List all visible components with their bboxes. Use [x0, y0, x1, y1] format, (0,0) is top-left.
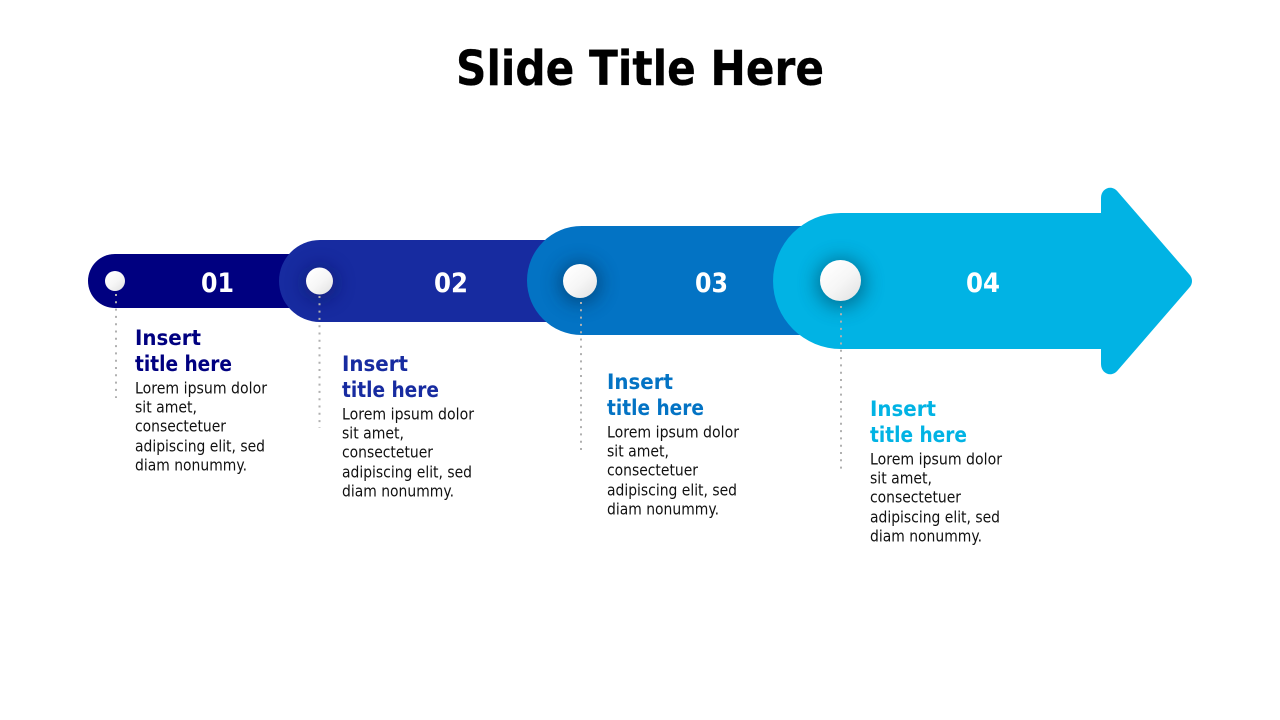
marker 02	[306, 268, 333, 294]
body text 02: adipiscing elit, sed	[342, 462, 472, 482]
arrow segment 04	[773, 188, 1192, 374]
heading 02: title here	[342, 378, 439, 402]
marker 04	[820, 260, 861, 301]
number 04: 04	[966, 268, 1000, 299]
body text 02: diam nonummy.	[342, 482, 454, 500]
body text 04: sit amet,	[870, 468, 932, 488]
body text 03: adipiscing elit, sed	[607, 480, 737, 500]
body text 01: sit amet,	[135, 398, 197, 416]
heading 01: Insert	[135, 326, 201, 350]
step 02	[279, 240, 546, 500]
segment 01	[88, 254, 340, 308]
body text 02: Lorem ipsum dolor	[342, 404, 474, 424]
body text 04	[870, 450, 1002, 546]
body text 01: diam nonummy.	[135, 456, 247, 474]
body text 03: sit amet,	[607, 442, 669, 460]
heading 02: Insert	[342, 352, 408, 376]
body text 04: diam nonummy.	[870, 526, 982, 546]
number 03: 03	[695, 268, 728, 299]
body text 03: consectetuer	[607, 460, 698, 480]
leader line 03	[580, 302, 582, 450]
heading 03	[607, 370, 704, 420]
body text 01: adipiscing elit, sed	[135, 436, 265, 456]
leader line 04	[840, 306, 842, 469]
leader line 02	[318, 296, 320, 428]
body text 01	[135, 378, 267, 474]
body text 04: consectetuer	[870, 488, 961, 506]
body text 04: Lorem ipsum dolor	[870, 450, 1002, 468]
marker glow 04	[816, 258, 866, 308]
body text 03: diam nonummy.	[607, 500, 719, 518]
heading 04: title here	[870, 423, 967, 447]
heading 03: title here	[607, 396, 704, 420]
marker glow 02	[303, 266, 337, 300]
leader line 01	[115, 294, 117, 398]
body text 03: Lorem ipsum dolor	[607, 422, 739, 442]
number 02: 02	[434, 268, 468, 299]
segment 02	[279, 240, 600, 322]
body text 01: Lorem ipsum dolor	[135, 378, 267, 398]
heading 01	[135, 326, 232, 376]
marker glow 03	[559, 262, 601, 304]
title: Slide Title Here	[456, 41, 824, 97]
heading 01: title here	[135, 352, 232, 376]
body text 04: adipiscing elit, sed	[870, 508, 1000, 526]
step 04	[773, 188, 1192, 546]
body text 02: sit amet,	[342, 424, 404, 442]
heading 02	[342, 352, 439, 402]
heading 04	[870, 397, 967, 447]
body text 02: consectetuer	[342, 442, 433, 462]
segment 03	[527, 226, 860, 335]
number 01: 01	[201, 268, 234, 299]
step 03	[527, 226, 802, 518]
heading 04: Insert	[870, 397, 936, 421]
marker 01	[105, 271, 125, 291]
body text 02	[342, 404, 474, 500]
marker 03	[563, 264, 597, 298]
body text 03	[607, 422, 739, 518]
heading 03: Insert	[607, 370, 673, 394]
step 01	[88, 254, 340, 474]
body text 01: consectetuer	[135, 416, 226, 436]
